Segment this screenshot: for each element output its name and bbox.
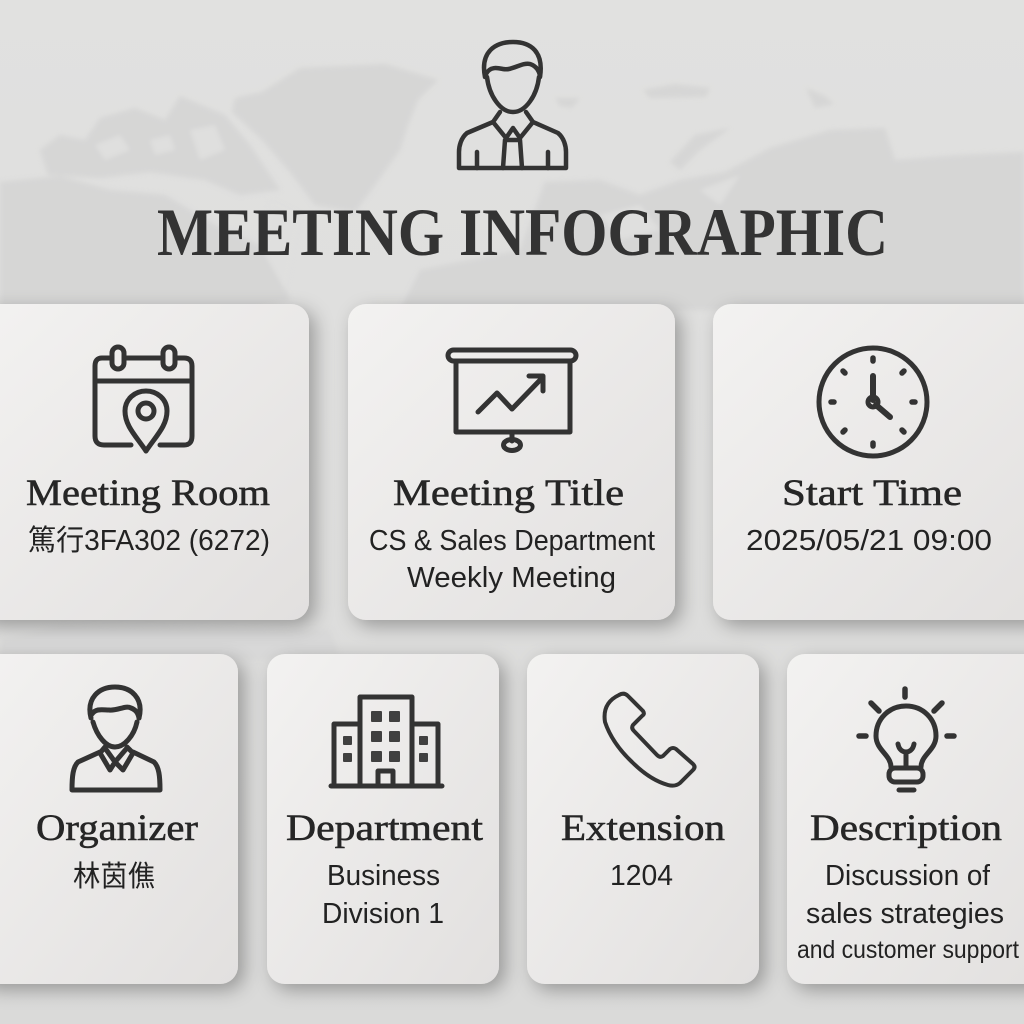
icon: businessman bbox=[459, 42, 566, 168]
value: department line 2: Division 1 bbox=[322, 898, 444, 930]
heading: extension: Extension bbox=[561, 808, 725, 849]
world map backdrop bbox=[0, 64, 1024, 660]
icon: light bulb bbox=[859, 689, 954, 790]
heading: department: Department bbox=[286, 808, 484, 849]
heading: start time: Start Time bbox=[782, 473, 962, 514]
heading: meeting title: Meeting Title bbox=[393, 473, 624, 514]
panel: description bbox=[787, 654, 1024, 984]
panel: extension bbox=[527, 654, 759, 984]
icon: telephone handset bbox=[605, 694, 694, 786]
icon: calendar with location pin bbox=[95, 347, 192, 451]
icon: organizer person bbox=[72, 687, 160, 790]
heading: description: Description bbox=[810, 808, 1002, 849]
icon: clock bbox=[819, 348, 927, 456]
value: start time: 2025/05/21 09:00 bbox=[746, 525, 992, 557]
heading: organizer: Organizer bbox=[36, 808, 198, 849]
value: description line 1: Discussion of bbox=[825, 860, 991, 892]
title: MEETING INFOGRAPHIC bbox=[157, 194, 888, 270]
panel: department bbox=[267, 654, 499, 984]
heading: meeting room: Meeting Room bbox=[26, 473, 270, 514]
panel: meeting room bbox=[0, 304, 309, 620]
panel: organizer bbox=[0, 654, 238, 984]
value: title line 1: CS & Sales Department bbox=[369, 525, 655, 557]
value: title line 2: Weekly Meeting bbox=[407, 562, 616, 594]
panel: start time bbox=[713, 304, 1024, 620]
value: organizer name: 林茵僬 bbox=[73, 860, 155, 893]
value: department line 1: Business bbox=[327, 860, 440, 892]
panel: meeting title bbox=[348, 304, 675, 620]
value: extension: 1204 bbox=[610, 860, 673, 892]
icon: office building bbox=[331, 697, 442, 786]
value: description line 2: sales strategies bbox=[806, 898, 1004, 930]
icon: presentation screen bbox=[448, 350, 576, 450]
value: room: 篤行3FA302 (6272) bbox=[28, 524, 270, 557]
